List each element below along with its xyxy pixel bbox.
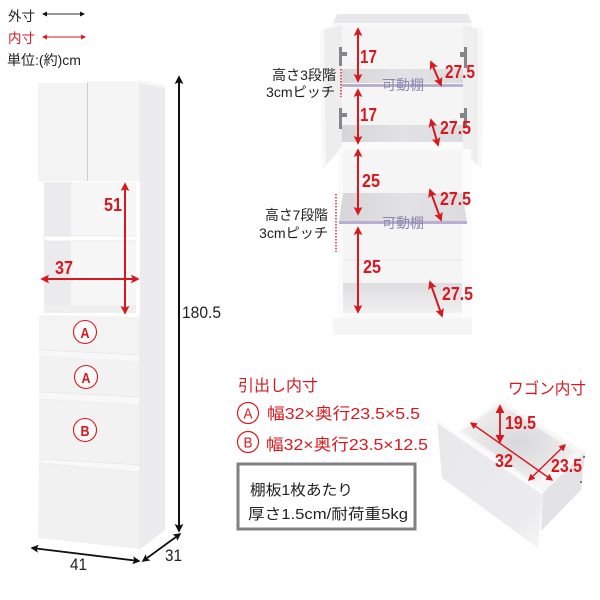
dimension numbers right view: 27.5 — [442, 284, 473, 304]
dimension: width 41 — [32, 548, 139, 574]
size A: A — [244, 406, 252, 422]
cabinet side panel — [139, 80, 165, 550]
dimension numbers right view: 17 — [360, 47, 377, 67]
size B: 幅32×奥行23.5×12.5 — [266, 436, 428, 454]
dimension: width 41: 41 — [70, 555, 87, 574]
wagon dimensions — [471, 406, 582, 480]
right door — [463, 25, 483, 168]
hinges — [339, 47, 467, 129]
dimension numbers right view: 27.5 — [440, 118, 471, 138]
movable shelf label upper: 可動棚 — [382, 77, 424, 93]
legend: units key: 単位:(約)cm — [7, 52, 81, 68]
label A: A — [80, 325, 90, 342]
size B: B — [244, 434, 252, 452]
wagon dimensions: 23.5 — [551, 456, 582, 476]
drawer sizes heading: 引出し内寸 — [238, 377, 318, 395]
shelf spec box: 棚板1枚あたり — [250, 482, 353, 499]
drawer B — [39, 399, 139, 465]
wagon front top edge — [437, 420, 543, 495]
label A second: A — [82, 370, 91, 387]
open shelf compartment — [40, 181, 140, 316]
shelf spec box: 厚さ1.5cm/耐荷重5kg — [248, 506, 408, 523]
drawer A lower — [39, 356, 139, 397]
dimension: depth 31 — [143, 534, 182, 565]
movable shelf lower — [339, 221, 467, 224]
drawer B strip — [40, 459, 140, 472]
legend: units key: 内寸 — [8, 31, 35, 46]
pitch note: 3 steps: 3cmピッチ — [266, 84, 335, 100]
dimension numbers right view: 27.5 — [445, 62, 475, 82]
cabinet: open doors view — [320, 14, 483, 335]
movable shelf label lower: 可動棚 — [382, 215, 424, 231]
wagon rim — [458, 400, 585, 493]
label B: B — [80, 423, 90, 440]
size A — [238, 402, 420, 424]
wagon dimensions: 32 — [495, 451, 513, 471]
drawer A lower strip — [40, 392, 140, 405]
upper doors — [38, 81, 139, 181]
drawer interior sizes — [238, 377, 428, 454]
wagon side panel — [541, 452, 585, 531]
plinth — [333, 318, 472, 335]
dimension: interior height 51: 51 — [104, 195, 122, 215]
pitch note: 3 steps — [266, 67, 341, 100]
pitch note: 3 steps: 高さ3段階 — [272, 67, 336, 83]
pitch note: 7 steps: 高さ7段階 — [265, 207, 328, 223]
drawer A upper — [39, 315, 139, 355]
dimension numbers right view: 25 — [363, 257, 381, 277]
size B — [238, 432, 428, 454]
legend: units key — [7, 9, 85, 68]
bottom drawer — [38, 463, 139, 549]
interior heights right view — [357, 29, 359, 312]
dimension numbers right view: 25 — [362, 171, 380, 191]
cabinet: closed front view — [38, 80, 165, 550]
wagon side fittings — [583, 456, 585, 458]
dimension: height 180.5: 180.5 — [182, 303, 221, 322]
size A: 幅32×奥行23.5×5.5 — [267, 405, 420, 423]
depth arrows right view — [430, 62, 442, 316]
drawer labels — [74, 320, 98, 442]
shelf spec box — [238, 464, 415, 529]
pitch note: 7 steps: 3cmピッチ — [259, 225, 328, 241]
pitch note: 7 steps — [259, 194, 336, 252]
dimension: depth 31: 31 — [165, 546, 182, 565]
left door — [320, 25, 342, 170]
wagon drawer illustration — [437, 400, 585, 548]
wagon dimensions: 19.5 — [505, 413, 536, 433]
wagon heading: ワゴン内寸 — [508, 379, 586, 398]
cabinet top edge — [139, 80, 165, 88]
movable shelf upper — [342, 84, 463, 87]
wagon front panel — [437, 420, 543, 548]
wagon interior — [462, 404, 576, 482]
dimension: interior height 51 — [104, 184, 125, 313]
lower body — [338, 149, 471, 318]
legend: units key: 外寸 — [8, 9, 35, 24]
dimension: interior width 37: 37 — [55, 258, 73, 278]
top panel — [333, 14, 472, 23]
upper interior — [342, 27, 464, 150]
dimension numbers right view: 17 — [360, 105, 377, 125]
drawer A upper shadow strip — [40, 350, 140, 362]
dimension numbers right view: 27.5 — [440, 189, 471, 209]
dimension numbers right view — [360, 47, 475, 304]
dimension: interior width 37 — [42, 258, 138, 279]
